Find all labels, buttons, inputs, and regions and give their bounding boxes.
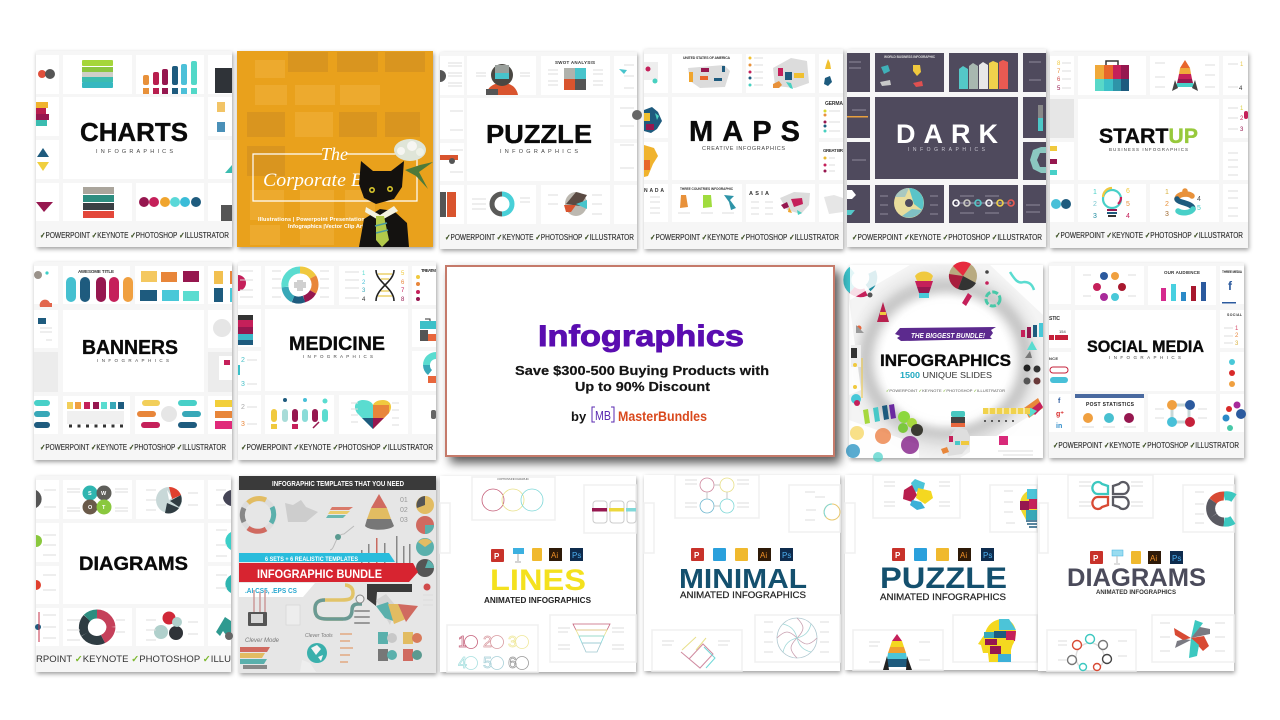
thermometer	[1038, 105, 1043, 131]
side heading: NCE	[1049, 356, 1058, 361]
title: DARK	[896, 119, 998, 149]
app icons: Ai	[1150, 554, 1157, 563]
top left ring	[847, 270, 873, 293]
panel: animated puzzle	[845, 475, 1038, 670]
Canada heading: NADA	[644, 188, 664, 194]
panel: social media: 154	[1059, 329, 1066, 334]
format list: ✓POWERPOINT ✓KEYNOTE ✓PHOTOSHOP ✓ILLUSTRATOR	[445, 233, 634, 242]
app icons	[691, 548, 793, 561]
heart	[355, 400, 391, 429]
caption: Illustrations | Powerpoint Presentations	[258, 217, 368, 223]
social heading: SOCIAL	[1227, 313, 1243, 317]
step numbers: 2	[1240, 116, 1244, 122]
ribbon red	[239, 563, 418, 582]
panel: medicine: 3	[241, 421, 245, 428]
donut	[492, 194, 512, 214]
panel: startup: 3	[1165, 211, 1169, 218]
stripes lower	[240, 647, 270, 669]
script label center: Clever Tools	[305, 633, 333, 639]
panel: startup: 3	[1093, 213, 1097, 220]
wheel	[285, 270, 315, 300]
subtitle: ANIMATED INFOGRAPHICS	[680, 590, 806, 600]
Germany heading: GERMA	[825, 101, 843, 107]
statistic heading: STIC	[1049, 316, 1060, 322]
puzzle cluster	[903, 479, 933, 510]
social square	[1167, 400, 1195, 427]
step numbers: 1	[1240, 106, 1244, 112]
rocket mini	[877, 302, 889, 322]
ring of circles	[1068, 634, 1112, 671]
subtitle: INFOGRAPHICS	[1109, 355, 1181, 360]
cone	[365, 494, 394, 530]
title: INFOGRAPHICS	[880, 351, 1011, 370]
header bar: INFOGRAPHIC TEMPLATES THAT YOU NEED	[272, 479, 404, 488]
ribbon stack lower	[83, 187, 114, 218]
subtitle: ANIMATED INFOGRAPHICS	[880, 592, 1006, 602]
app icons: P	[494, 552, 500, 561]
step numbers	[1057, 61, 1244, 133]
USA map	[688, 65, 730, 88]
title: PUZZLE	[880, 562, 1007, 595]
slide tag	[970, 436, 1042, 458]
bulb	[915, 272, 933, 298]
subtitle: INFOGRAPHICS	[500, 149, 578, 155]
dna: 5	[401, 271, 405, 277]
awesome heading: AWESOME TITLE	[78, 269, 114, 274]
panel: startup	[1050, 52, 1248, 248]
subtitle: ANIMATED INFOGRAPHICS	[484, 596, 592, 605]
panel: startup: 5	[1197, 205, 1201, 212]
pinwheel	[1174, 620, 1210, 658]
head puzzle	[564, 192, 587, 216]
app icons	[1090, 550, 1183, 564]
rocket	[1172, 60, 1198, 91]
panel: medicine	[238, 262, 436, 460]
panel: minimal	[644, 475, 840, 671]
step numbers: 6	[1057, 77, 1061, 83]
country shapes	[644, 59, 832, 177]
briefcase	[1095, 61, 1129, 91]
title: MINIMAL	[679, 563, 807, 594]
panel: infographic bundle: 01	[400, 497, 408, 504]
app icons: P	[694, 551, 700, 560]
continents	[880, 65, 923, 87]
title: PUZZLE	[486, 119, 592, 149]
dollar	[1177, 191, 1193, 213]
by label: by	[571, 409, 587, 424]
star wheel	[156, 487, 182, 513]
format list: ✓POWERPOINT ✓KEYNOTE ✓PHOTOSHOP ✓ILLUSTRATOR	[886, 388, 1005, 393]
audience heading: OUR AUDIENCE	[1164, 270, 1200, 275]
ribbon blue: 6 SETS + 6 REALISTIC TEMPLATES	[265, 556, 359, 563]
post statistics: POST STATISTICS	[1086, 402, 1135, 408]
offer line 1: Save $300-500 Buying Products with	[515, 364, 769, 378]
bar chart	[361, 536, 410, 563]
options heading: 3 OPTIONS INFOGRAPHIC	[497, 477, 530, 481]
pie	[949, 262, 977, 290]
panel: startup: 1	[1165, 189, 1169, 196]
panel: dark	[847, 49, 1046, 247]
puzzle rocket	[883, 634, 912, 670]
ribbons	[1050, 146, 1057, 175]
panel: banners	[34, 262, 232, 460]
caption line 2: Infographics |Vector Clip Art	[288, 224, 364, 230]
panel: medicine: 2	[241, 357, 245, 364]
head icon	[486, 64, 518, 95]
title: STARTUP	[1099, 125, 1198, 148]
title: MAPS	[689, 116, 800, 148]
header bar	[239, 476, 436, 490]
clover loops	[1092, 482, 1129, 509]
panel: infographic bundle: 03	[400, 517, 408, 524]
dna: 7	[401, 288, 405, 294]
dna: 1	[362, 271, 366, 277]
dna: 3	[362, 288, 366, 294]
project pills	[137, 400, 201, 428]
app icons: P	[895, 551, 901, 560]
panel: social media: 2	[1235, 333, 1239, 339]
funnel	[573, 624, 610, 652]
outlined numerals: 2	[483, 634, 492, 651]
title: CHARTS	[80, 117, 188, 147]
script label left: Clever Mode	[245, 638, 280, 644]
three countries	[678, 195, 736, 213]
panel: social media	[1049, 263, 1246, 458]
panel: infographic bundle: 02	[400, 507, 408, 514]
line tabs	[592, 501, 636, 523]
format list: ✓POWERPOINT ✓KEYNOTE ✓PHOTOSHOP ✓ILLUSTRATOR	[650, 233, 839, 242]
hexagon ring	[1030, 147, 1046, 173]
mini cylinder	[951, 411, 965, 427]
color blobs	[846, 426, 919, 462]
script subheading: Corporate Bu	[263, 171, 373, 191]
flowers	[394, 139, 433, 189]
legend dots	[748, 56, 763, 86]
small pies	[378, 632, 422, 661]
SWOT circles: T	[102, 505, 106, 511]
timeline	[953, 200, 1014, 206]
SWOT puzzle	[564, 68, 586, 90]
panel: medicine: 3	[241, 381, 245, 388]
step numbers: 3	[1240, 127, 1244, 133]
first aid	[420, 319, 436, 341]
tv	[248, 612, 267, 626]
outlined numerals: 4	[458, 655, 467, 672]
europe map	[941, 427, 972, 456]
subtitle: CREATIVE INFOGRAPHICS	[702, 146, 785, 152]
panel: social media: in	[1056, 423, 1062, 430]
portraits	[1024, 364, 1040, 384]
ring graphic	[423, 352, 436, 383]
panel: charts	[36, 51, 232, 247]
puzzle head	[978, 619, 1016, 662]
format list: ✓POWERPOINT ✓KEYNOTE ✓PHOTOSHOP ✓ILLUSTRATOR	[40, 443, 226, 452]
seven tags	[67, 402, 124, 426]
panel: diagrams	[35, 476, 233, 672]
app icons: Ps	[572, 551, 581, 560]
dna: 8	[401, 297, 405, 303]
panel: infographic bundle	[239, 476, 436, 673]
bottle	[238, 315, 253, 345]
brush patches	[140, 271, 199, 301]
panel: animated diagrams	[1038, 475, 1234, 671]
outlined numerals: 1	[458, 634, 467, 651]
paper boat	[285, 500, 318, 522]
panel: social media: g⁺	[1056, 411, 1064, 418]
outlined numerals: 3	[508, 634, 517, 651]
ribbon white: .AI CS5, .EPS CS	[245, 586, 297, 595]
step numbers: 5	[1057, 86, 1061, 92]
segmented ring	[83, 614, 111, 640]
panel: social media: f	[1058, 398, 1061, 405]
subtitle: ANIMATED INFOGRAPHICS	[1096, 590, 1176, 596]
three countries heading: THREE COUNTRIES INFOGRAPHIC	[680, 187, 734, 191]
step numbers: 8	[1057, 61, 1061, 67]
panel: startup: 2	[1165, 201, 1169, 208]
strip tags	[863, 404, 896, 424]
globe	[300, 643, 327, 672]
panel: startup: 5	[1126, 201, 1130, 208]
step numbers: 7	[1057, 69, 1061, 75]
stripes	[326, 507, 353, 518]
app icons: Ps	[782, 551, 791, 560]
MB logo: MB	[595, 408, 611, 423]
center card	[446, 266, 834, 456]
panel: startup: 2	[1093, 201, 1097, 208]
dna	[362, 270, 405, 303]
capsules	[271, 398, 328, 429]
dna: 6	[401, 280, 405, 286]
panel: maps	[644, 49, 844, 249]
mini bar	[847, 116, 868, 118]
cat	[359, 161, 409, 247]
world heading: WORLD BUSINESS INFOGRAPHIC	[884, 55, 936, 59]
small wheel	[986, 292, 1000, 306]
pipe path	[315, 585, 362, 619]
panel: medicine: 2	[241, 404, 245, 411]
clover	[898, 411, 923, 436]
app icons: Ps	[1172, 554, 1181, 563]
world pins	[644, 62, 658, 84]
audience bars	[1161, 282, 1206, 301]
step numbers: 1	[1240, 62, 1244, 68]
app icons	[491, 548, 583, 562]
script heading: The	[321, 144, 348, 164]
ribbon white	[239, 583, 315, 597]
shutter wheel	[777, 618, 817, 658]
panel: startup: 1	[1093, 189, 1097, 196]
app icons: Ps	[983, 551, 992, 560]
slide count: 1500 UNIQUE SLIDES	[900, 370, 992, 380]
Asia heading: ASIA	[749, 191, 769, 197]
blocks	[440, 192, 456, 217]
line circles	[482, 489, 543, 511]
app icons: Ai	[760, 551, 767, 560]
SWOT circles	[82, 486, 112, 514]
brush banner	[895, 327, 996, 341]
format list: ✓POWERPOINT ✓KEYNOTE ✓PHOTOSHOP ✓ILLUSTRATOR	[1053, 441, 1239, 450]
format list: ✓POWERPOINT ✓KEYNOTE ✓PHOTOSHOP ✓ILLUSTRATOR	[852, 233, 1042, 242]
title: DIAGRAMS	[79, 553, 188, 575]
panel: startup: 6	[1126, 188, 1130, 195]
ribbon red: INFOGRAPHIC BUNDLE	[257, 569, 382, 581]
SWOT heading: SWOT ANALYSIS	[555, 60, 595, 65]
segmented wheel	[1211, 496, 1234, 522]
format list: ✓POWERPOINT ✓KEYNOTE ✓PHOTOSHOP ✓ILLUSTRATOR	[1055, 231, 1243, 240]
bars	[1021, 323, 1043, 358]
subtitle: INFOGRAPHICS	[908, 147, 986, 153]
offer line 2: Up to 90% Discount	[575, 380, 711, 394]
format list: ✓POWERPOINT ✓KEYNOTE ✓PHOTOSHOP ✓ILLUSTRATOR	[241, 443, 433, 452]
panel: social media: 3	[1235, 341, 1239, 347]
SWOT circles: O	[88, 505, 93, 511]
puzzle bulb	[1020, 489, 1037, 527]
title: SOCIAL MEDIA	[1087, 338, 1204, 356]
facebook glyph: f	[1228, 279, 1233, 293]
ribbon stack	[82, 60, 113, 88]
subtitle: BUSINESS INFOGRAPHICS	[1109, 147, 1188, 152]
format list: ✓POWERPOINT ✓KEYNOTE ✓PHOTOSHOP ✓ILLUSTRATOR	[40, 231, 229, 240]
dna: 4	[362, 297, 366, 303]
SWOT circles: W	[101, 491, 107, 497]
panel: puzzle	[440, 52, 642, 249]
Great Britain heading: GREAT BR	[823, 148, 844, 153]
outlined numerals	[458, 634, 517, 672]
Asia map	[780, 192, 810, 215]
side circles	[416, 496, 434, 577]
four circles	[700, 478, 734, 513]
slide shards	[849, 265, 1043, 458]
panel: social media: 1	[1235, 326, 1239, 332]
subtitle: INFOGRAPHICS	[97, 358, 169, 363]
app icons: Ai	[960, 551, 967, 560]
title: MEDICINE	[289, 333, 385, 355]
bar icons	[143, 61, 197, 94]
title: BANNERS	[82, 337, 178, 359]
social ring	[1083, 272, 1136, 301]
panel: corporate bundle	[237, 51, 433, 247]
hexagon row	[139, 197, 201, 207]
tag row	[983, 408, 1030, 421]
title: DIAGRAMS	[1067, 564, 1206, 592]
subtitle: INFOGRAPHICS	[96, 149, 173, 155]
app icons: Ai	[551, 551, 558, 560]
app icons: P	[1093, 554, 1099, 563]
title: LINES	[490, 564, 586, 597]
step numbers: 4	[1239, 86, 1243, 92]
frame	[253, 154, 417, 201]
clover ring	[154, 612, 183, 640]
left ring	[242, 498, 274, 531]
hexagons	[1051, 199, 1071, 209]
treatment heading: TREATM	[421, 268, 436, 273]
format list: RPOINT ✓KEYNOTE ✓PHOTOSHOP ✓ILLU	[36, 654, 231, 665]
app icons	[892, 548, 994, 561]
subtitle: INFOGRAPHICS	[303, 354, 373, 359]
arrow tags	[959, 60, 1008, 89]
USA heading: UNITED STATES OF AMERICA	[683, 56, 730, 60]
panel: startup: 4	[1126, 213, 1130, 220]
Europe map	[773, 58, 809, 89]
dna: 2	[362, 280, 366, 286]
diamond lines	[681, 637, 715, 668]
brand name: MasterBundles	[618, 409, 707, 424]
panel: lines	[440, 476, 636, 672]
striped shield	[367, 584, 418, 625]
spiral wheel	[894, 188, 924, 218]
heading: Infographics	[538, 320, 744, 353]
pills	[66, 277, 133, 302]
panel: biggest bundle	[846, 262, 1043, 462]
post statistics	[1075, 394, 1144, 427]
SWOT circles: S	[88, 491, 92, 497]
line ring	[824, 504, 840, 520]
side heading: three media: THREE MEDIA	[1222, 270, 1243, 274]
bulb	[1103, 188, 1121, 217]
panel: startup: 4	[1197, 196, 1201, 203]
ribbon blue	[239, 553, 395, 563]
brush banner: THE BIGGEST BUNDLE!	[911, 331, 985, 340]
outlined numerals: 6	[508, 655, 517, 672]
outlined numerals: 5	[483, 655, 492, 672]
